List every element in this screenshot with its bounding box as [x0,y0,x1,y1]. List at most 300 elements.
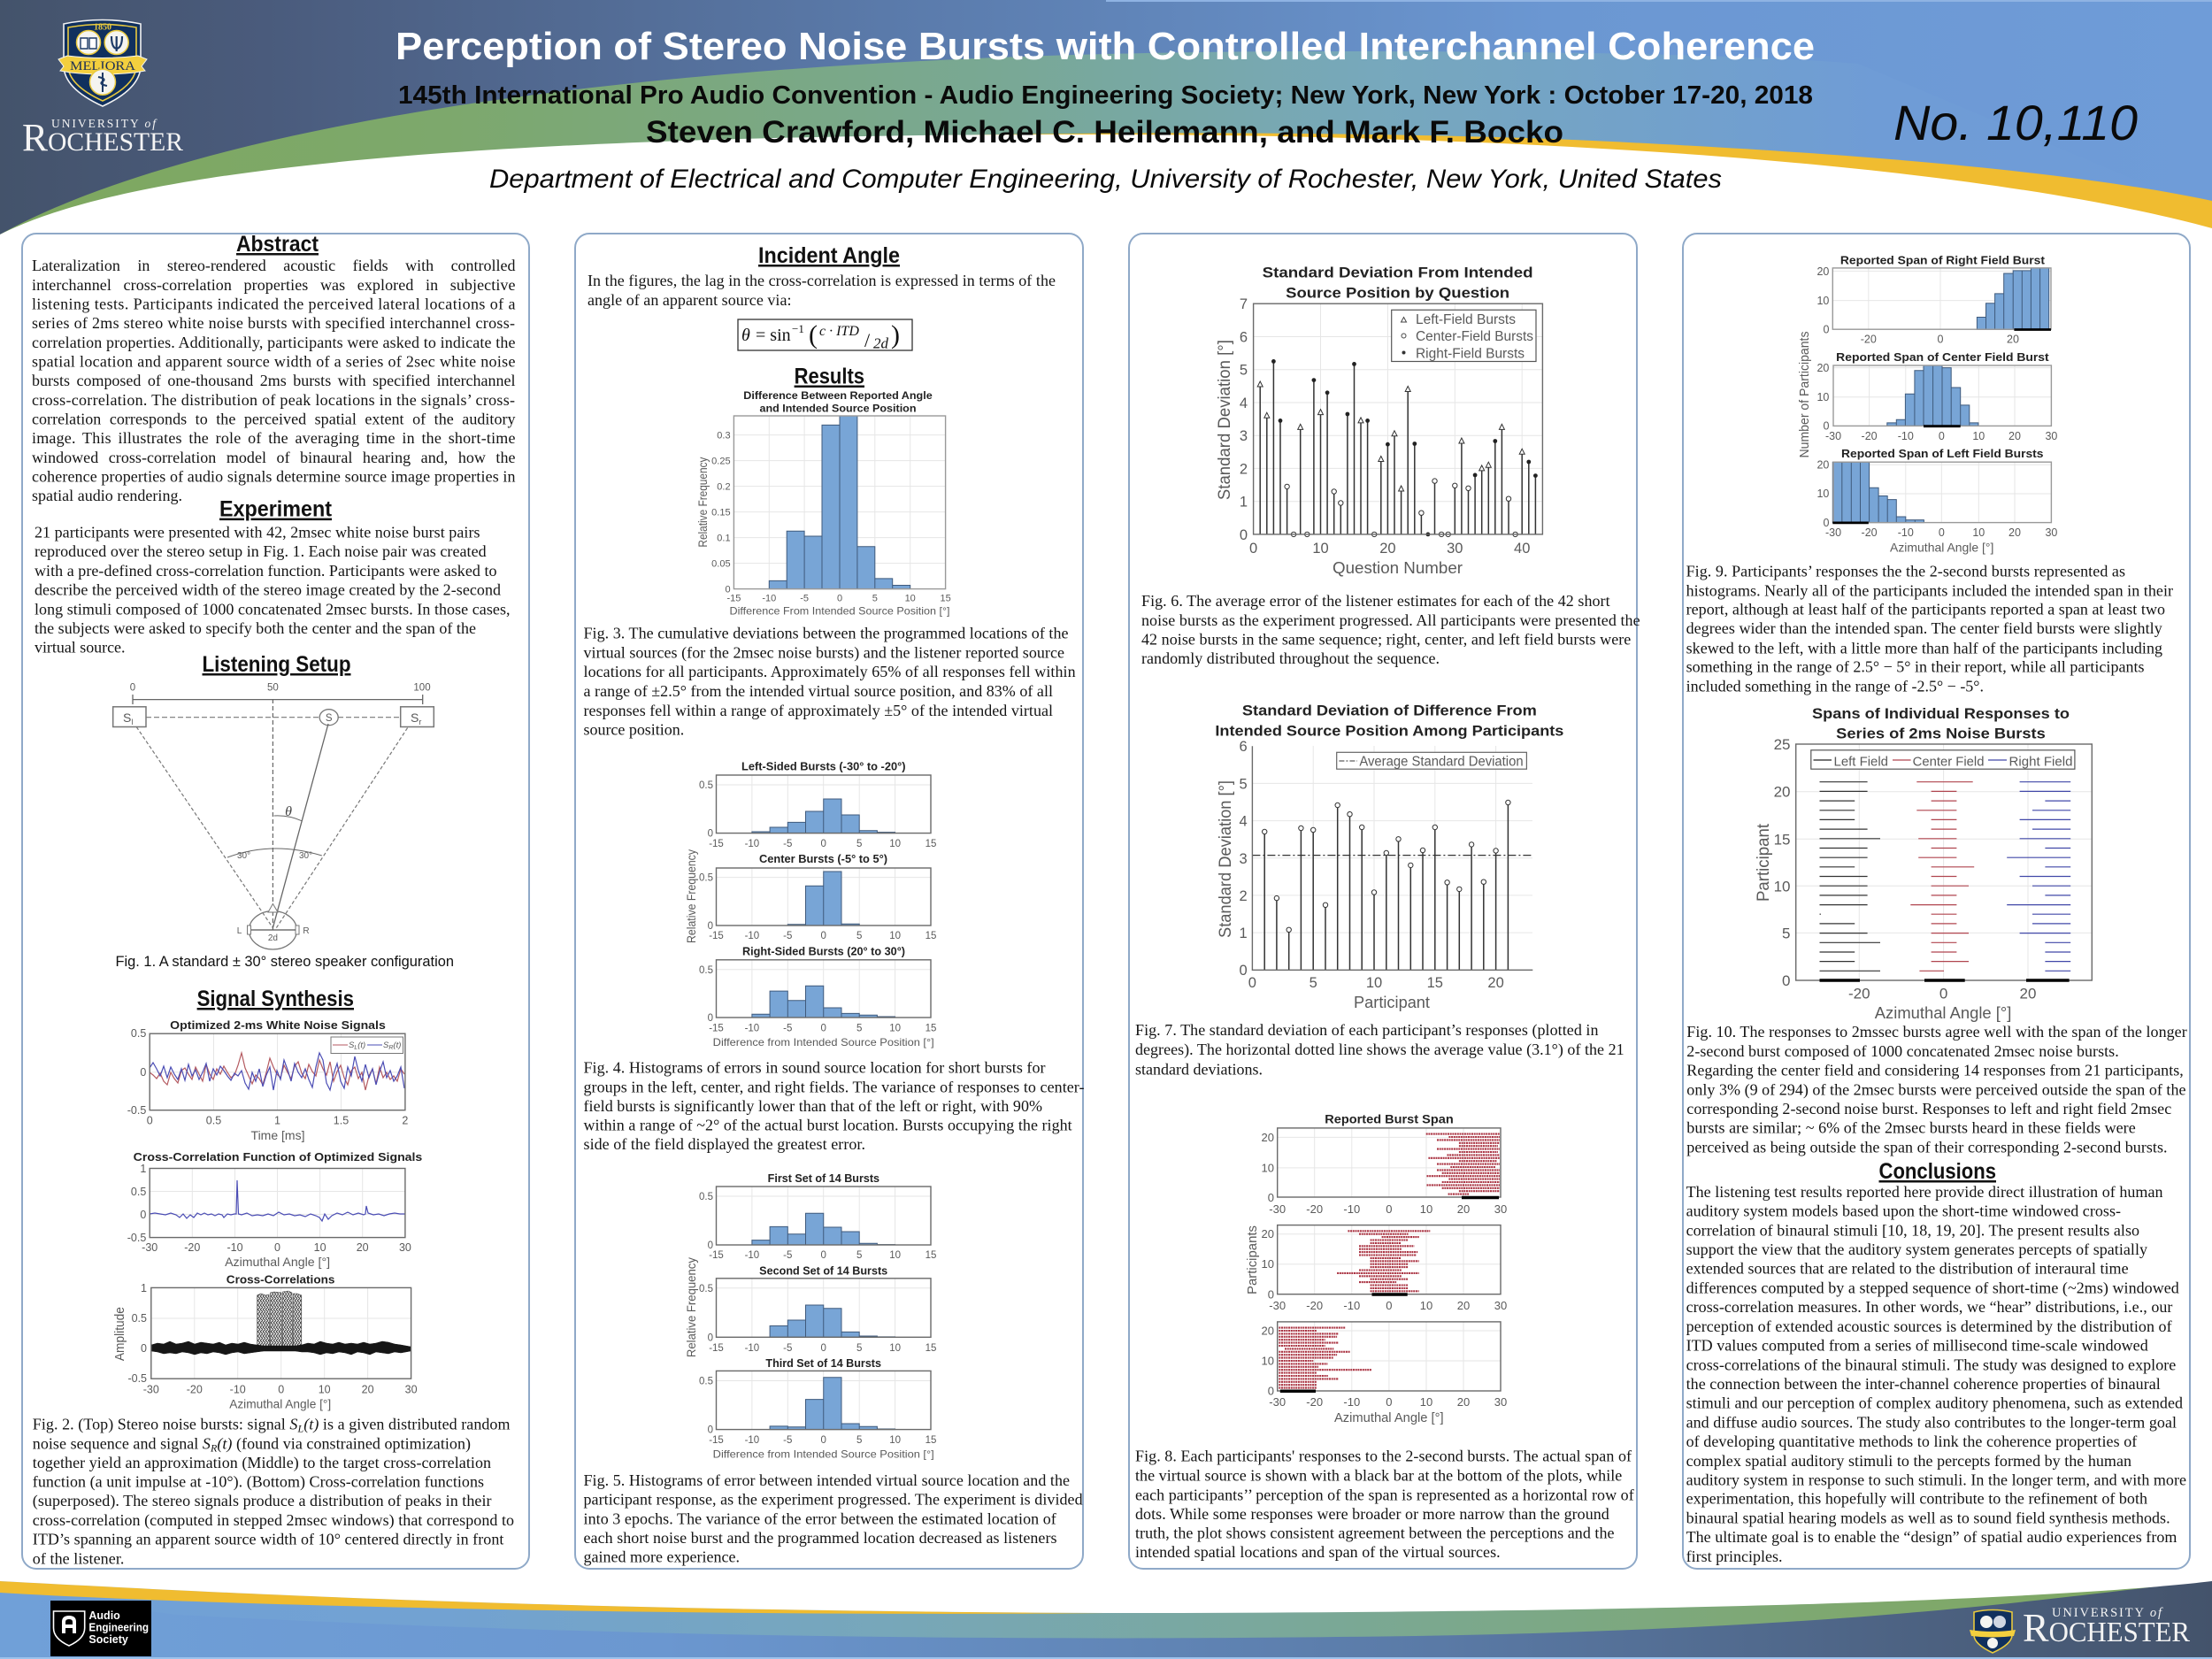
chart: Fig. 4 right-sided bursts: -5 [783,1024,792,1034]
caption: Fig. 9: included something in the range of -2.5° − -5°. [1686,677,1984,695]
text block: conclusions: perception of extended acoustic sources is determined by the distribution of [1686,1317,2172,1335]
chart: Fig. 10 spans of individual responses: 0 [1782,972,1791,989]
heading: Results: Results [795,365,864,389]
chart: Fig. 4 right-sided bursts: 15 [926,1024,936,1034]
diagram: stereo speaker configuration: R [303,926,310,936]
icon: university shield small [1970,1610,2016,1653]
chart: Fig. 4 left-sided bursts: Left-Sided Bursts (-30° to -20°) [741,761,906,773]
caption: Fig. 9: histograms. Nearly all of the participants included the intended span in their [1686,581,2173,599]
chart: Fig. 9 left field histogram: 0 [1939,526,1945,539]
text block: abstract: cross-correlation. The distribution of peak locations in the signals’ cross- [32,391,515,409]
caption: Fig. 4: Fig. 4. Histograms of errors in sound source location for short bursts for [584,1058,1046,1076]
chart: Fig. 5 first set: -5 [783,1250,792,1261]
chart: Fig. 5 second set: Second Set of 14 Bursts [759,1265,887,1278]
chart: Fig. 9 left field histogram: 30 [2045,526,2057,539]
caption: Fig. 2: R [210,1441,218,1454]
formula: incident angle: θ [741,326,750,345]
caption: Fig. 5: each short noise burst and the programmed location decreased as listeners [584,1529,1056,1547]
icon: university shield: MELIORA [70,59,135,73]
plot: left field spans: -10 [1343,1395,1360,1409]
chart: Fig. 5 first set: First Set of 14 Bursts [768,1172,879,1185]
chart: Fig. 9 right field histogram: 0 [1823,324,1829,336]
chart: Fig. 10 spans of individual responses: 0 [1939,986,1947,1002]
chart: Fig. 5 first set: 0.5 [699,1192,713,1202]
caption: Fig. 2: (found via constrained optimization) [236,1434,471,1452]
chart: Fig. 10 spans of individual responses: 5 [1782,925,1791,941]
caption: Fig. 2: L [296,1423,303,1435]
logo: University of Rochester footer: UNIVERSITY of [2052,1606,2163,1620]
chart: superposed cross-correlations: -0.5 [127,1372,147,1385]
text block: abstract: listening tests. Participants indicated the perceived lateral locations of a [32,295,515,312]
text block: conclusions: The listening test results reported here provide direct illustration of human [1686,1183,2162,1201]
chart: Fig. 9 center field histogram: 20 [1816,362,1829,374]
chart: superposed cross-correlations: -10 [230,1384,246,1396]
chart: Fig. 9 center field histogram: -20 [1862,430,1878,442]
chart: Fig. 7 stem plot: Standard Deviation [°] [1216,780,1235,938]
legend [1392,310,1536,361]
chart: Fig. 9 left field histogram: 0 [1823,517,1829,529]
chart: cross-correlation function: 0 [140,1209,146,1221]
chart: Fig. 5 first set: 0 [820,1250,826,1261]
text block: experiment: virtual source. [35,639,126,657]
diagram: stereo speaker configuration: 30° [299,851,312,861]
text block: conclusions: complex spatial auditory stimuli to the percepts formed by the human [1686,1452,2131,1470]
plot: right field spans: 0 [1386,1202,1393,1216]
chart: Fig. 4 left-sided bursts: 0 [820,839,826,849]
chart: Fig. 10 spans of individual responses: Spans of Individual Responses to [1812,705,2070,722]
poster number: No. 10,110 [1893,95,2138,150]
diagram: stereo speaker configuration: S [326,713,333,724]
chart: optimized white noise signals: (t) [357,1041,365,1050]
chart: Fig. 10 spans of individual responses: Participant [1755,823,1773,902]
chart: Fig. 10 spans of individual responses: 20 [2020,986,2036,1002]
chart: superposed cross-correlations: 0.5 [132,1312,147,1325]
chart: Fig. 5 first set: 5 [856,1250,862,1261]
plot: center field spans [1262,1225,1507,1312]
caption: Fig. 1: Fig. 1. A standard ± 30° stereo speaker configuration [115,954,454,970]
chart: Fig. 8 reported burst span [1246,1112,1507,1425]
plot: left field spans: 30 [1494,1395,1507,1409]
chart: Fig. 9 center field histogram: Reported Span of Center Field Burst [1836,351,2050,364]
caption: Fig. 5: Fig. 5. Histograms of error between intended virtual source location and the [584,1471,1070,1489]
plot: right field spans: -20 [1306,1202,1323,1216]
chart: Fig. 8 reported burst span: Participants [1246,1225,1260,1294]
chart: Fig. 9 left field histogram: 20 [1816,458,1829,471]
chart: Fig. 9 center field histogram: 30 [2045,430,2057,442]
logo: Audio Engineering Society [50,1601,151,1656]
chart: cross-correlation function: -30 [142,1241,157,1254]
chart: Fig. 7 stem plot: 10 [1366,975,1382,991]
chart: Fig. 5 third set: 0.5 [699,1377,713,1387]
text block: conclusions: stimuli and our perception of complex auditory phenomena, such as extended [1686,1394,2183,1412]
chart: Fig. 9 left field histogram: Azimuthal Angle [°] [1890,540,1993,554]
text block: experiment: the subjects were asked to specify both the center and the span of the [35,619,476,637]
chart: optimized white noise signals: 0 [140,1066,146,1079]
chart: optimized white noise signals: (t) [393,1041,401,1050]
legend: Center-Field Bursts [1416,329,1533,344]
caption: Fig. 8: Fig. 8. Each participants' responses to the 2-second bursts. The actual span of [1135,1447,1632,1464]
chart: Fig. 4 center bursts: -15 [709,931,724,941]
chart: Fig. 4 right-sided bursts: Right-Sided Bursts (20° to 30°) [742,945,905,957]
chart: cross-correlation function: 1 [140,1163,146,1175]
heading: Conclusions: Conclusions [1879,1159,1996,1184]
icon: university shield [58,19,147,106]
plot: right field spans [1262,1128,1507,1216]
chart: Fig. 3 histogram: 5 [872,593,878,603]
chart: optimized white noise signals: L [354,1045,357,1051]
chart: Fig. 9 center field histogram [1816,351,2057,442]
chart: Fig. 9 center field histogram: 0 [1823,419,1829,432]
chart: Fig. 5 second set: -10 [745,1343,759,1354]
chart: superposed cross-correlations: 10 [319,1384,331,1396]
caption: Fig. 4: within a range of ~2° of the actual burst location. Bursts occupying the right [584,1117,1072,1134]
chart: Fig. 4 left-sided bursts [699,761,936,849]
formula: incident angle: c · ITD [819,324,859,339]
diagram: stereo speaker configuration: 0 [130,682,135,693]
chart: Fig. 4 right-sided bursts: -15 [709,1024,724,1034]
caption: Fig. 9: degrees wider than the intended span. The center field bursts were slightly [1686,619,2162,637]
chart: Fig. 6 stem plot: Source Position by Question [1286,285,1509,301]
caption: Fig. 10: corresponding 2-second noise burst. Responses to left and right field 2msec [1686,1100,2171,1118]
chart: Fig. 4 right-sided bursts: 0.5 [699,965,713,976]
chart: Fig. 5 third set: -5 [783,1435,792,1446]
chart: Fig. 4 left-sided bursts: 0.5 [699,780,713,791]
heading: Incident Angle: Incident Angle [758,243,900,268]
chart: Fig. 9 left field histogram: -30 [1825,526,1841,539]
chart: Fig. 9 right field histogram: 20 [1816,265,1829,278]
caption: Fig. 6: randomly distributed throughout the sequence. [1141,649,1440,667]
plot: center field spans: -30 [1269,1299,1286,1312]
chart: Fig. 9 right field histogram: -20 [1861,334,1877,346]
chart: Fig. 5 first set: 10 [889,1250,901,1261]
text block: abstract: bursts composed of one-thousand 2ms bursts with specified interchannel [32,372,515,389]
plot: center field spans: 20 [1262,1227,1274,1240]
caption: Fig. 2: (t) [217,1434,232,1453]
chart: Fig. 6 stem plot: 6 [1240,329,1248,345]
diagram: stereo speaker configuration: S [123,710,131,725]
chart: superposed cross-correlations: -20 [187,1384,203,1396]
chart: superposed cross-correlations: Azimuthal Angle [°] [229,1396,331,1410]
logo: University of Rochester header [22,19,183,159]
chart: Fig. 4 center bursts [699,853,936,941]
text block: abstract: interchannel cross-correlation properties was explored in subjective [32,276,515,294]
chart: Fig. 7 stem plot: 3 [1240,851,1248,867]
caption: Fig. 8 [1135,1447,1634,1561]
chart: superposed cross-correlations [113,1274,418,1410]
chart: Fig. 10 spans of individual responses: 20 [1774,784,1791,801]
text block: incident angle: angle of an apparent source via: [588,291,791,309]
chart: Fig. 5 third set: 10 [889,1435,901,1446]
chart: Fig. 7 stem plot: 0 [1240,963,1248,979]
diagram: stereo speaker configuration: 100 [413,682,431,693]
chart: Fig. 5 first set: -10 [745,1250,759,1261]
chart: Fig. 6 stem plot: Standard Deviation [°] [1215,340,1234,500]
chart: Fig. 9 left field histogram: -20 [1862,526,1878,539]
chart: Fig. 9 center field histogram: -30 [1825,430,1841,442]
axis label: Fig. 9 number of participants: Number of Participants [1798,331,1812,458]
text block: experiment: long stimuli composed of 1000 concatenated 2msec bursts. In those cases, [35,601,510,618]
chart: cross-correlation function [127,1151,422,1269]
chart: optimized white noise signals: 0.5 [131,1027,146,1040]
chart: Fig. 3 histogram: 0 [837,593,842,603]
chart: Fig. 7 stem plot: 5 [1310,975,1317,991]
panel: abstract, experiment, setup, synthesis [22,232,529,1569]
caption: Fig. 3: a range of ±2.5° from the intended virtual source position, and 83% of all [584,682,1053,700]
chart: optimized white noise signals: R [388,1045,393,1051]
plot: left field spans: 10 [1420,1395,1432,1409]
chart: Fig. 4 left-sided bursts: 0 [708,829,713,840]
plot: center field spans: 0 [1268,1288,1274,1301]
diagram: stereo speaker configuration: S [411,710,419,725]
plot: left field spans: 10 [1262,1354,1274,1368]
chart: Fig. 3 histogram: 15 [940,593,951,603]
text block: conclusions: cross-correlations of the binaural stimuli. The study was designed to explore [1686,1356,2176,1373]
caption: Fig. 3 [584,625,1076,738]
chart: Fig. 9 left field histogram: 10 [1816,488,1829,500]
chart: Fig. 5 second set: -5 [783,1343,792,1354]
text block: conclusions: differences computed by a stepped sequence of short-time (~2ms) windowed [1686,1279,2179,1297]
plot: right field spans: 20 [1262,1131,1274,1144]
logo: University of Rochester header: ROCHESTER [22,116,183,159]
chart: Fig. 9 right field histogram [1816,254,2051,346]
caption: Fig. 4 [584,1058,1085,1153]
chart: Fig. 5 third set: Difference from Intended Source Position [°] [713,1448,934,1461]
caption: Fig. 2: cross-correlation (computed in stepped 2msec windows) that correspond to [33,1511,514,1530]
caption: Fig. 10 [1686,1023,2187,1156]
caption: Fig. 3: virtual sources (for the 2msec noise bursts) and the listener reported source [584,644,1064,663]
chart: Fig. 7 stem plot: Intended Source Position Among Participants [1215,722,1563,739]
caption: Fig. 7: Fig. 7. The standard deviation of each participant’s responses (plotted in [1135,1021,1598,1040]
chart: Fig. 3 histogram: Relative Frequency [696,457,710,548]
plot: center field spans: 0 [1386,1299,1393,1312]
chart: Fig. 6 stem plot: 20 [1379,541,1396,557]
chart: Fig. 6 stem plot: 40 [1514,541,1530,557]
text block: experiment: with a pre-defined cross-correlation function. Participants were asked to [35,562,497,580]
panel: incident angle and results [575,234,1085,1569]
chart: Fig. 10 spans of individual responses: -20 [1848,986,1870,1002]
caption: Fig. 7 [1135,1021,1624,1078]
chart: Fig. 5 second set: 10 [889,1343,901,1354]
chart: superposed cross-correlations: Amplitude [113,1307,127,1361]
caption: Fig. 8: intended spatial locations and span of the virtual sources. [1135,1543,1501,1561]
chart: Fig. 6 stem plot: 3 [1240,428,1248,444]
chart: Fig. 3 histogram: Difference From Intended Source Position [°] [729,605,950,618]
text block: incident angle: In the figures, the lag in the cross-correlation is expressed in terms of the [588,272,1056,289]
chart: Fig. 3 histogram: 0.25 [711,457,731,467]
chart: optimized white noise signals: Time [ms] [251,1128,304,1142]
chart: Fig. 6 stem plot: Question Number [1333,558,1463,577]
text block: abstract [32,257,515,504]
chart: superposed cross-correlations: 0 [278,1384,284,1396]
caption: Fig. 6 [1141,592,1640,667]
caption: Fig. 9 [1686,562,2173,695]
footer banner [0,1571,2212,1659]
chart: cross-correlation function: Azimuthal Angle [°] [225,1255,330,1269]
chart: Fig. 5 second set: 0.5 [699,1284,713,1294]
caption: Fig. 6: noise bursts as the experiment progressed. All participants were presented the [1141,611,1640,629]
chart: superposed cross-correlations: Cross-Correlations [227,1274,334,1286]
text block: conclusions: extended sources that are related to the distribution of interaural time [1686,1260,2129,1278]
plot: right field spans: -30 [1269,1202,1286,1216]
chart: Fig. 6 stem plot [1215,265,1542,577]
chart: Fig. 5 third set: -10 [745,1435,759,1446]
chart: Fig. 5 third set [699,1357,936,1461]
chart: Fig. 5 second set: -15 [709,1343,724,1354]
chart: Fig. 4 right-sided bursts: 0 [820,1024,826,1034]
chart: Fig. 7 stem plot: 4 [1240,814,1248,830]
chart: superposed cross-correlations: 0 [141,1342,147,1355]
chart: superposed cross-correlations: 20 [362,1384,374,1396]
chart: Fig. 4 right-sided bursts: -10 [745,1024,759,1034]
chart: superposed cross-correlations: -30 [143,1384,159,1396]
chart: Fig. 3 histogram: 0.3 [717,431,731,442]
chart: superposed cross-correlations: 30 [405,1384,418,1396]
chart: cross-correlation function: -10 [227,1241,243,1254]
caption: Fig. 10: bursts are similar; ~ 6% of the 2msec bursts heard in these fields were [1686,1119,2136,1137]
caption: Fig. 2 [33,1416,514,1567]
chart: optimized white noise signals: S [349,1041,354,1050]
chart: Fig. 6 stem plot: 0 [1249,541,1257,557]
chart: Fig. 7 stem plot: 5 [1240,776,1248,792]
chart: Fig. 9 right field histogram: 20 [2007,334,2019,346]
plot: right field spans: 10 [1420,1202,1432,1216]
plot: right field spans: 20 [1457,1202,1470,1216]
chart: Fig. 6 stem plot: 30 [1447,541,1463,557]
chart: Fig. 4 left-sided bursts: 10 [889,839,901,849]
text block: abstract: coherence properties of audio signals determine source image properties in [32,468,515,486]
title: Perception of Stereo Noise Bursts with Controlled Interchannel Coherence [396,25,1815,68]
authors: Steven Crawford, Michael C. Heilemann, and Mark F. Bocko [646,115,1563,150]
chart: cross-correlation function: -20 [184,1241,200,1254]
chart: Fig. 4 left-sided bursts: -15 [709,839,724,849]
chart: optimized white noise signals: Optimized 2-ms White Noise Signals [170,1019,386,1032]
plot: left field spans [1262,1322,1507,1409]
caption: Fig. 3: responses fell within a range of approximately ±5° of the intended virtual [584,702,1053,719]
chart: Fig. 7 stem plot: 0 [1248,975,1256,991]
chart: Fig. 5 third set: 0 [708,1425,713,1436]
chart: Fig. 9 left field histogram: Reported Span of Left Field Bursts [1841,448,2044,460]
legend: Average Standard Deviation [1359,755,1524,770]
caption: Fig. 2: ITD’s spanning an apparent source width of 10° centered directly in front [33,1531,503,1548]
caption: Fig. 2: Fig. 2. (Top) Stereo noise bursts: signal S [33,1416,297,1433]
text block: conclusions: auditory system models based upon the short-time windowed cross- [1686,1202,2121,1220]
chart: Fig. 9 left field histogram: 10 [1972,526,1985,539]
caption: Fig. 2: noise sequence and signal S [33,1434,211,1452]
chart: Fig. 6 stem plot: Standard Deviation From Intended [1263,265,1533,281]
text block: conclusions: ITD values computed from a series of millisecond time-scale windowed [1686,1336,2148,1354]
chart: cross-correlation function: 0.5 [131,1186,146,1198]
chart: Fig. 7 stem plot: 20 [1487,975,1504,991]
text block: experiment: describe the perceived width of the stereo image created by the 2-second [35,580,501,598]
chart: Fig. 3 histogram: -5 [800,593,809,603]
formula: incident angle: ) [891,320,900,349]
caption: Fig. 8: each participants’’ perception of the span is represented as a horizontal row of [1135,1486,1634,1503]
caption: Fig. 7: standard deviations. [1135,1060,1263,1078]
chart: Fig. 4 center bursts: 0 [820,931,826,941]
chart: cross-correlation function: 30 [399,1241,411,1254]
conference subtitle: 145th International Pro Audio Convention - Audio Engineering Society; New York, New York : October 17-20, 2018 [398,81,1813,110]
chart: Fig. 4 right-sided bursts: 0 [708,1013,713,1024]
chart: Fig. 5 second set: 0 [708,1333,713,1343]
plot: left field spans: -20 [1306,1395,1323,1409]
caption: Fig. 2: function (a unit impulse at -10°). (Bottom) Cross-correlation functions [33,1472,484,1491]
chart: Fig. 4 center bursts: 5 [856,931,862,941]
chart: Fig. 3 histogram: Difference Between Reported Angle [743,391,933,402]
chart: Fig. 4 center bursts: 0 [708,921,713,932]
heading: Listening Setup: Listening Setup [202,652,350,677]
chart: cross-correlation function: 0 [274,1241,280,1254]
chart: Fig. 5 third set: 15 [926,1435,936,1446]
chart: Fig. 4 right-sided bursts [699,945,936,1048]
chart: Fig. 6 stem plot: 7 [1240,296,1248,312]
chart: Fig. 9 right field histogram: Reported Span of Right Field Burst [1840,254,2046,266]
text block: abstract: spatial location and apparent source width of a series of 2sec white noise [32,352,515,370]
text block: conclusions: correlation of binaural stimuli [10, 18, 19, 20]. The present results also [1686,1221,2139,1239]
plot: center field spans: -20 [1306,1299,1323,1312]
chart: optimized white noise signals [127,1019,408,1142]
formula: incident angle: / [864,329,871,351]
text block: conclusions [1686,1183,2186,1565]
caption: Fig. 9: skewed to the left, with a little more than half of the participants including [1686,640,2162,657]
chart: Fig. 6 stem plot: 4 [1240,396,1248,411]
caption: Fig. 8: truth, the plot shows consistent agreement between the perceptions and the [1135,1525,1614,1542]
department: Department of Electrical and Computer Engineering, University of Rochester, New York, United States [489,165,1722,194]
caption: Fig. 3: Fig. 3. The cumulative deviations between the programmed locations of the [584,625,1069,642]
chart: Fig. 4 center bursts: -10 [745,931,759,941]
chart: Fig. 5 third set: Third Set of 14 Bursts [765,1357,881,1370]
chart: Fig. 9 right field histogram: 10 [1816,295,1829,307]
chart: Fig. 10 spans of individual responses [1755,705,2092,1022]
formula: incident angle: ( [809,320,818,349]
chart: Fig. 6 stem plot: 5 [1240,363,1248,379]
text block: conclusions: binaural spatial hearing models as well as to sound field synthesis methods. [1686,1509,2170,1527]
caption: Fig. 7: degrees). The horizontal dotted line shows the average value (3.1°) of the 21 [1135,1041,1624,1059]
plot: left field spans: 0 [1268,1384,1274,1398]
chart: Fig. 3 histogram: 0.2 [717,482,731,493]
caption: Fig. 4: groups in the left, center, and right fields. The variance of responses to center- [584,1078,1085,1095]
diagram: stereo speaker configuration: L [237,926,242,936]
diagram: stereo speaker configuration: θ [285,804,292,819]
chart: Fig. 9 center field histogram: 10 [1972,430,1985,442]
logo: Audio Engineering Society: Audio [88,1609,120,1622]
caption: Fig. 4: field bursts is significantly lower than that of the left or right, with 90% [584,1097,1042,1115]
diagram: stereo speaker configuration: 30° [237,851,250,861]
plot: center field spans: -10 [1343,1299,1360,1312]
caption: Fig. 9: Fig. 9. Participants’ responses the the 2-second bursts represented as [1686,562,2125,580]
text block: abstract: correlation properties. Additionally, participants were asked to indicate the [32,334,515,351]
chart: optimized white noise signals: 2 [402,1115,408,1127]
caption: Fig. 4: side of the field displayed the greatest error. [584,1135,865,1153]
plot: left field spans: 0 [1386,1395,1393,1409]
chart: Fig. 7 stem plot: 2 [1240,888,1248,904]
chart: Fig. 4 left-sided bursts: -5 [783,839,792,849]
chart: Fig. 5 first set: 15 [926,1250,936,1261]
chart: Fig. 3 histogram: -10 [762,593,776,603]
caption: Fig. 2: of the listener. [33,1549,124,1567]
plot: left field spans: 20 [1262,1324,1274,1338]
diagram: stereo speaker configuration: l [131,718,133,726]
legend: Left Field [1833,755,1888,770]
chart: Fig. 4 left-sided bursts: 15 [926,839,936,849]
chart: Fig. 3 histogram: -15 [726,593,741,603]
plot: center field spans: 10 [1420,1299,1432,1312]
chart: Fig. 9 center field histogram: 20 [2008,430,2021,442]
plot: right field spans: 10 [1262,1161,1274,1175]
chart: Fig. 5 first set: 0 [708,1240,713,1251]
chart: Fig. 7 stem plot: 6 [1240,739,1248,755]
chart: optimized white noise signals: S [383,1041,388,1050]
heading: Abstract: Abstract [236,232,319,257]
